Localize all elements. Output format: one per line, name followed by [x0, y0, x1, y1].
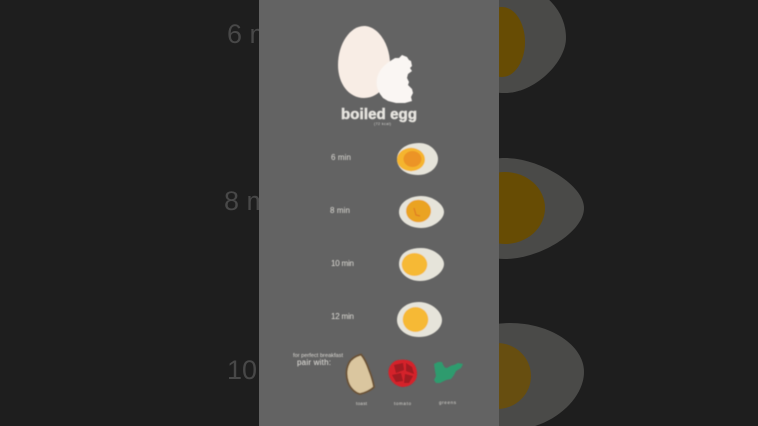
label: 10 min: 10 min [331, 259, 354, 268]
calories note: (72 kcal) [374, 122, 391, 126]
label: toast: toast [356, 401, 368, 406]
blurred backdrop: time labels: 8 min [224, 186, 290, 216]
icon: cracked egg shell [377, 55, 413, 103]
egg: 10 min [399, 248, 444, 281]
blurred backdrop: eggs [440, 0, 584, 426]
label: 8 min: 8 min [330, 206, 350, 215]
icon: greens [434, 362, 463, 383]
pairing intro: pair with: [297, 358, 331, 367]
blurred backdrop: time labels: 6 min [227, 19, 293, 49]
blurred backdrop: time labels [225, 24, 259, 380]
blurred backdrop: time labels: 10 min [227, 355, 308, 385]
title: boiled egg [341, 106, 417, 123]
label: tomato: tomato [394, 401, 411, 406]
egg: 6 min [397, 143, 438, 175]
label: 12 min: 12 min [331, 312, 354, 321]
label: 6 min: 6 min [331, 153, 351, 162]
icon: whole egg [338, 26, 390, 98]
egg: 8 min [399, 196, 444, 228]
label: greens: greens [439, 400, 457, 405]
pairing intro: for perfect breakfast [293, 353, 343, 359]
icon: toast [347, 354, 374, 394]
egg: 12 min [397, 302, 442, 337]
center panel [259, 0, 499, 426]
pairing intro [293, 353, 343, 367]
icon: tomato [388, 360, 417, 387]
